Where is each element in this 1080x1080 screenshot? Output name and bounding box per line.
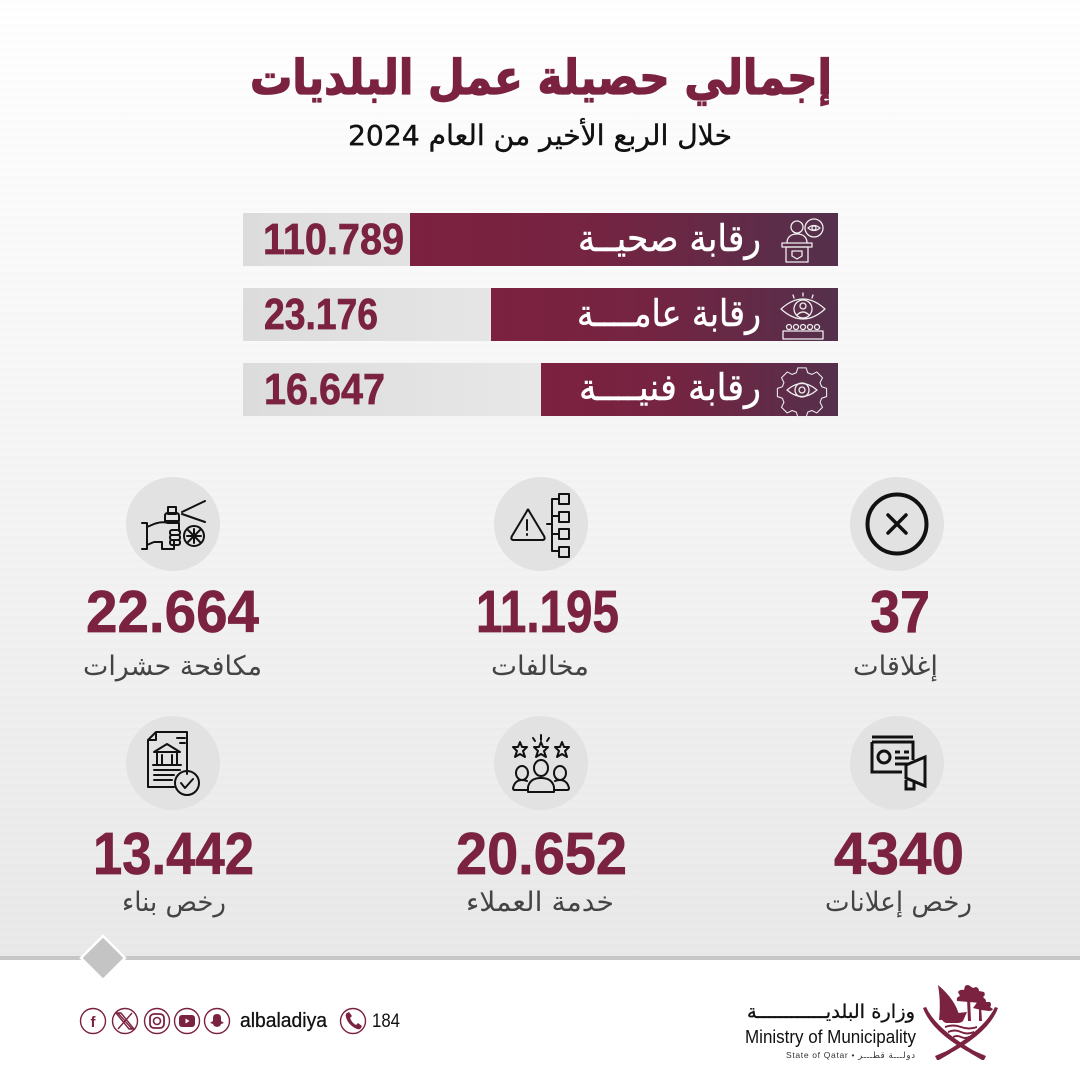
bar row: health inspection [243, 213, 838, 266]
stat: pest control [83, 477, 262, 682]
state of qatar line: State of Qatar • دولـــة قطـــر [786, 1050, 915, 1060]
social handle: albaladiya [240, 1010, 328, 1032]
icon: document with building and check [126, 716, 220, 810]
dhow sail and hull [938, 985, 960, 1020]
footer panel [0, 936, 1080, 1080]
icon: billboard with megaphone [850, 716, 944, 810]
label: technical inspection: رقابة فنيــــة [579, 366, 761, 409]
icon: people with three stars [494, 716, 588, 810]
stat: advertising permits [825, 716, 972, 918]
icon: facebook: f [90, 1014, 96, 1031]
diamond marker [81, 936, 125, 980]
label: closures: إغلاقات [853, 651, 938, 682]
subtitle: خلال الربع الأخير من العام 2024 [348, 117, 732, 152]
crossed swords [923, 1007, 976, 1055]
emblem [923, 985, 998, 1060]
value: pest control: 22.664 [86, 579, 259, 645]
icon: inspector at desk [782, 219, 823, 262]
label: health inspection: رقابة صحيــة [578, 217, 761, 260]
icon: youtube [174, 1008, 200, 1034]
icon: warning with checklist [494, 477, 588, 571]
stat: closures [850, 477, 944, 682]
arabic ministry name: وزارة البلديــــــــــــة [747, 1001, 915, 1023]
social icons [80, 1008, 230, 1034]
bar row: technical inspection [243, 363, 838, 417]
icon: snapchat [204, 1008, 230, 1034]
hotline number: 184 [372, 1011, 400, 1032]
icon: x in circle [850, 477, 944, 571]
value: closures: 37 [870, 579, 930, 645]
value: customer service: 20.652 [456, 821, 627, 887]
stat: violations [476, 477, 619, 682]
stat: building permits [93, 716, 254, 918]
label: general inspection: رقابة عامــــة [577, 292, 761, 335]
value: advertising permits: 4340 [834, 821, 964, 887]
title: إجمالي حصيلة عمل البلديات [250, 50, 832, 106]
stat: customer service [456, 716, 627, 918]
label: building permits: رخص بناء [122, 887, 226, 918]
value: building permits: 13.442 [93, 821, 254, 887]
value: technical inspection: 16.647 [264, 365, 385, 414]
icon: gear with eye [777, 368, 827, 417]
english ministry name: Ministry of Municipality [745, 1027, 916, 1047]
value: health inspection: 110.789 [263, 215, 404, 264]
icon: phone [340, 1008, 366, 1034]
icon: X [112, 1008, 138, 1034]
icon: eye over crowd [781, 293, 825, 339]
icon: spray and insect [126, 477, 220, 571]
palm trees [967, 998, 982, 1021]
icon: facebook [80, 1008, 106, 1034]
ministry name [745, 1001, 916, 1060]
value: violations: 11.195 [476, 579, 619, 645]
label: violations: مخالفات [491, 651, 589, 682]
label: advertising permits: رخص إعلانات [825, 887, 972, 918]
label: customer service: خدمة العملاء [466, 887, 614, 918]
value: general inspection: 23.176 [264, 290, 378, 339]
label: pest control: مكافحة حشرات [83, 651, 262, 682]
bar row: general inspection [243, 288, 838, 341]
icon: instagram [144, 1008, 170, 1034]
waves [945, 1024, 977, 1039]
